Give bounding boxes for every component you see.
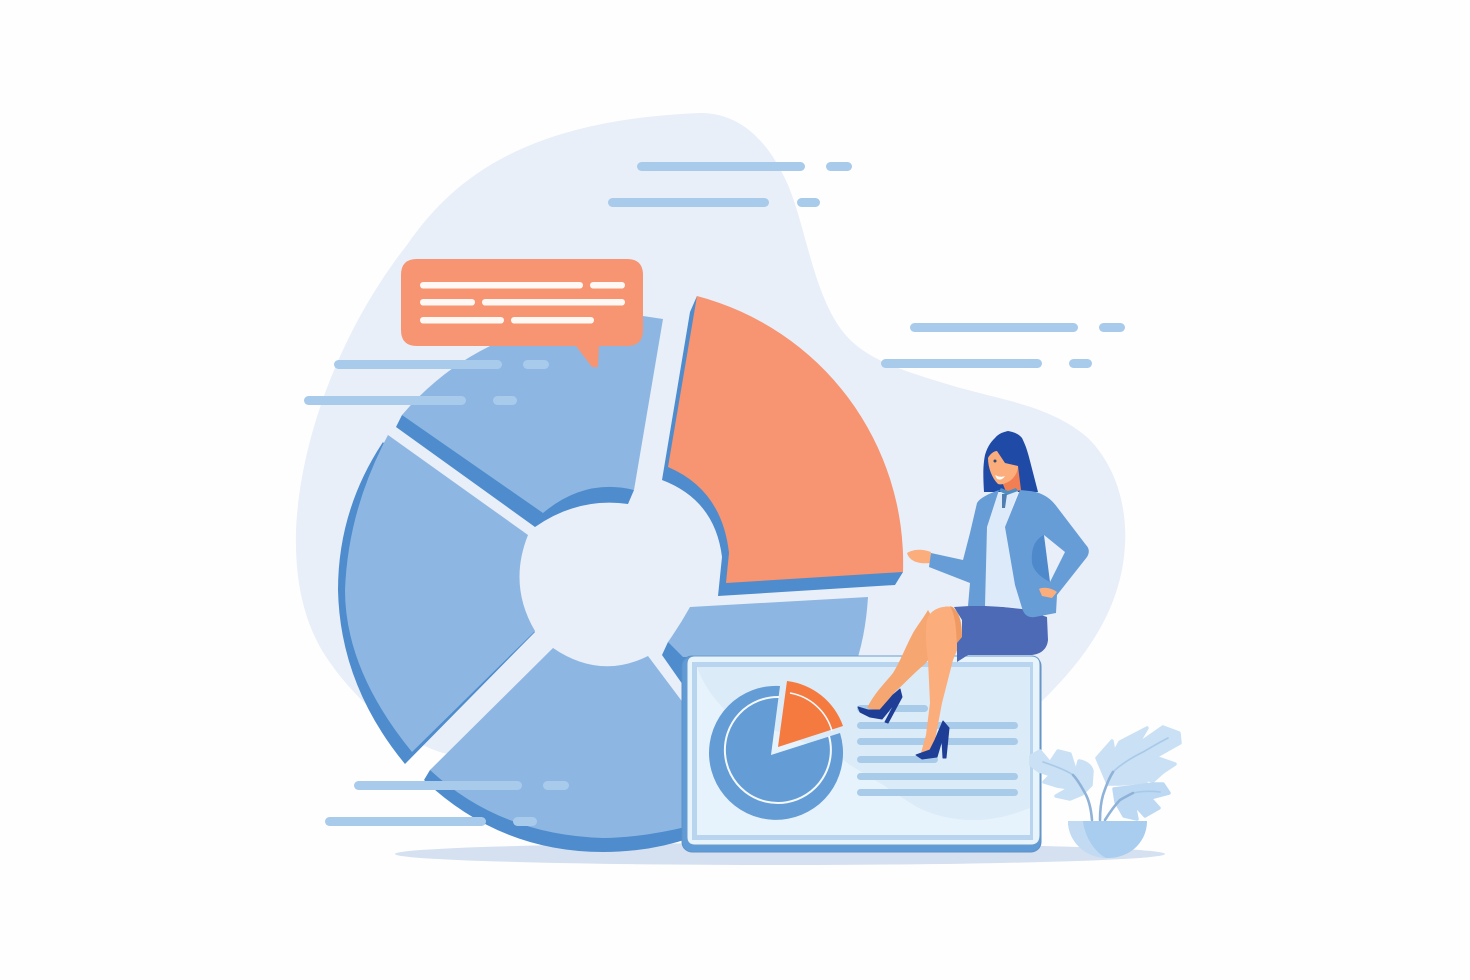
stems	[1073, 772, 1133, 820]
left hand	[907, 550, 931, 563]
jacket	[929, 490, 1089, 617]
face	[988, 451, 1018, 484]
arm gap	[1044, 535, 1065, 582]
background blob	[296, 113, 1125, 818]
leaf veins	[1043, 738, 1168, 793]
segment: left	[338, 435, 535, 764]
eye and smile	[994, 460, 1005, 480]
back leg	[867, 610, 945, 711]
woman presenter	[858, 431, 1089, 759]
thigh shadow	[950, 606, 962, 645]
card text lines	[857, 705, 1018, 796]
report card	[682, 656, 1041, 852]
segment: highlighted orange	[662, 296, 903, 596]
pot	[1068, 821, 1147, 858]
skirt	[954, 605, 1048, 662]
hair	[983, 431, 1038, 492]
front shoe	[916, 721, 949, 759]
front leg	[921, 607, 960, 753]
right hand	[1039, 588, 1057, 598]
plant	[1031, 727, 1180, 858]
lower right leaf	[1114, 784, 1169, 819]
jacket shadow	[1032, 535, 1052, 582]
shirt	[985, 491, 1022, 608]
left leaf	[1031, 751, 1092, 799]
segment: top	[396, 316, 663, 527]
right big leaf	[1097, 727, 1180, 784]
segment: bottom	[424, 648, 690, 852]
ground shadow	[395, 843, 1165, 865]
segment: right	[662, 597, 868, 695]
donut chart	[338, 296, 903, 852]
motion lines	[304, 162, 1125, 826]
neck and collar	[1002, 466, 1021, 494]
speech bubble	[401, 259, 643, 367]
back shoe	[858, 689, 902, 723]
card pie chart	[709, 681, 843, 820]
